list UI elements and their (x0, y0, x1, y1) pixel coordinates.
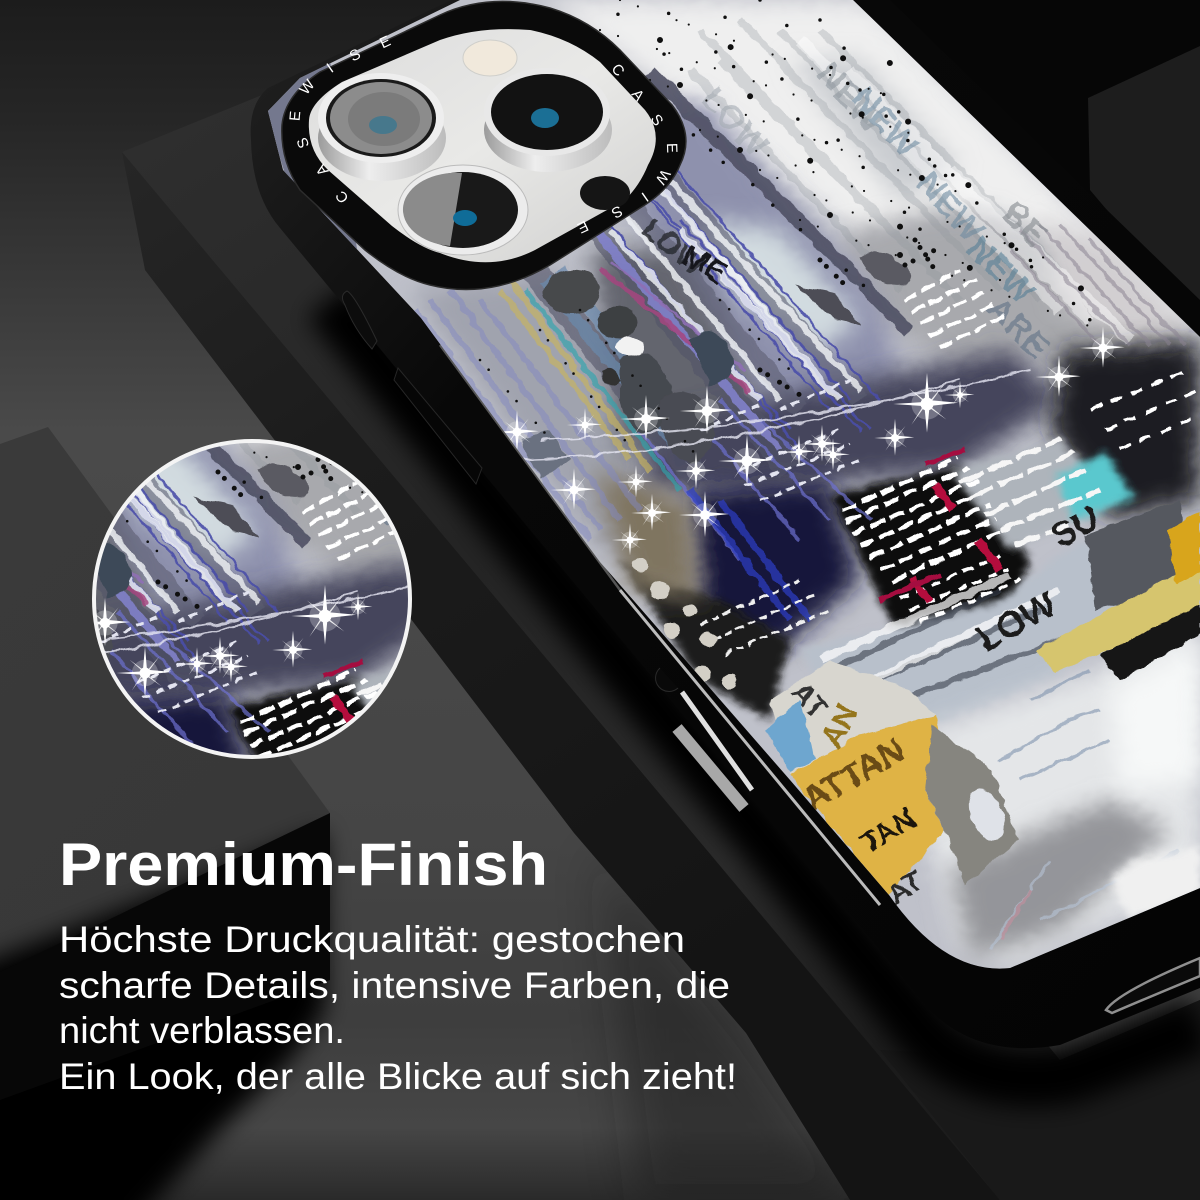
ring lettering: CASEWISE: I (324, 60, 337, 77)
camera ring (282, 1, 686, 290)
ring lettering: CASEWISE: S (347, 46, 364, 65)
ring lettering: CASEWISE: S (294, 135, 313, 151)
printed artwork (250, 0, 1200, 1000)
body text: Höchste Druckqualität: gestochen (59, 919, 685, 960)
ring lettering: CASEWISE (287, 33, 680, 236)
lower-left plinth top (0, 427, 330, 972)
heading: Premium-Finish (59, 831, 548, 898)
gloss rim (440, 345, 620, 590)
lens: top left (318, 73, 446, 181)
top-right block (1088, 46, 1200, 320)
ring lettering: CASEWISE: E (663, 143, 680, 153)
phone cast shadow (330, 300, 1200, 1078)
button: small side (342, 291, 377, 349)
ring lettering: CASEWISE: S (608, 202, 625, 221)
ring lettering: CASEWISE: A (628, 86, 647, 105)
ring lettering: CASEWISE: E (287, 110, 304, 122)
button: silver side (656, 668, 752, 808)
body text: scharfe Details, intensive Farben, die (59, 965, 730, 1006)
phone body (251, 0, 1200, 1048)
shade on lower floor (600, 850, 860, 1200)
flash (463, 40, 517, 76)
ring lettering: CASEWISE: I (638, 188, 651, 205)
body text (59, 919, 737, 1097)
ring lettering: CASEWISE: C (608, 61, 628, 80)
body text: nicht verblassen. (59, 1010, 345, 1051)
lens: bottom (398, 165, 528, 255)
ring lettering: CASEWISE: W (651, 166, 674, 188)
detail magnifier circle (92, 439, 412, 759)
charging port (1106, 958, 1200, 1013)
block side face (122, 152, 1000, 1200)
ring lettering: CASEWISE: C (332, 187, 352, 206)
button: volume (394, 368, 482, 484)
plinth front face (0, 813, 330, 1200)
ring lettering: CASEWISE: W (296, 76, 319, 98)
microphone sensor (580, 176, 630, 210)
ring lettering: CASEWISE: E (575, 217, 591, 236)
lens: top right (484, 68, 612, 172)
ring lettering: CASEWISE: E (377, 33, 393, 52)
camera glass window (309, 29, 656, 262)
phone (250, 0, 1200, 1048)
ring lettering: CASEWISE: A (313, 161, 332, 179)
body text: Ein Look, der alle Blicke auf sich zieht! (59, 1056, 737, 1097)
bottom-right floor (880, 1000, 1200, 1200)
ring lettering: CASEWISE: S (647, 111, 666, 129)
